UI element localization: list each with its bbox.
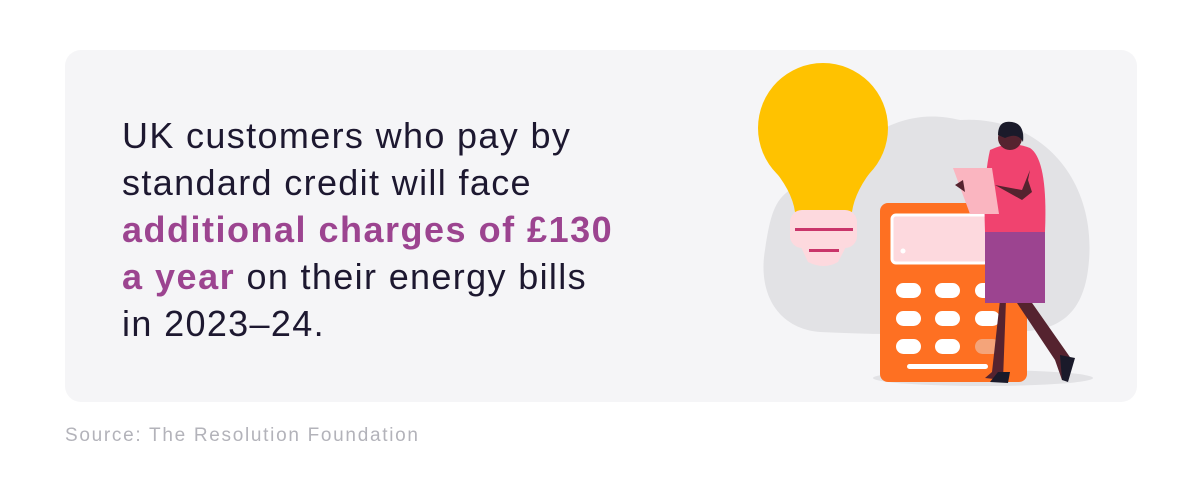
- icon: light bulb: [758, 63, 888, 266]
- text block: statement: standard credit will face: [122, 162, 532, 203]
- shadow: [873, 370, 1093, 386]
- background blob: [763, 116, 1090, 334]
- text block: statement: UK customers who pay by: [122, 115, 571, 156]
- text block: statement: [122, 115, 613, 344]
- text block: statement: additional charges of £130: [122, 209, 613, 250]
- icon: calculator: [880, 203, 1027, 382]
- text block: statement: a year on their energy bills: [122, 256, 587, 297]
- figure: woman: [953, 122, 1075, 383]
- panel: card: [65, 50, 1137, 402]
- text block: statement: in 2023–24.: [122, 303, 325, 344]
- source note: Source: The Resolution Foundation: [65, 425, 420, 446]
